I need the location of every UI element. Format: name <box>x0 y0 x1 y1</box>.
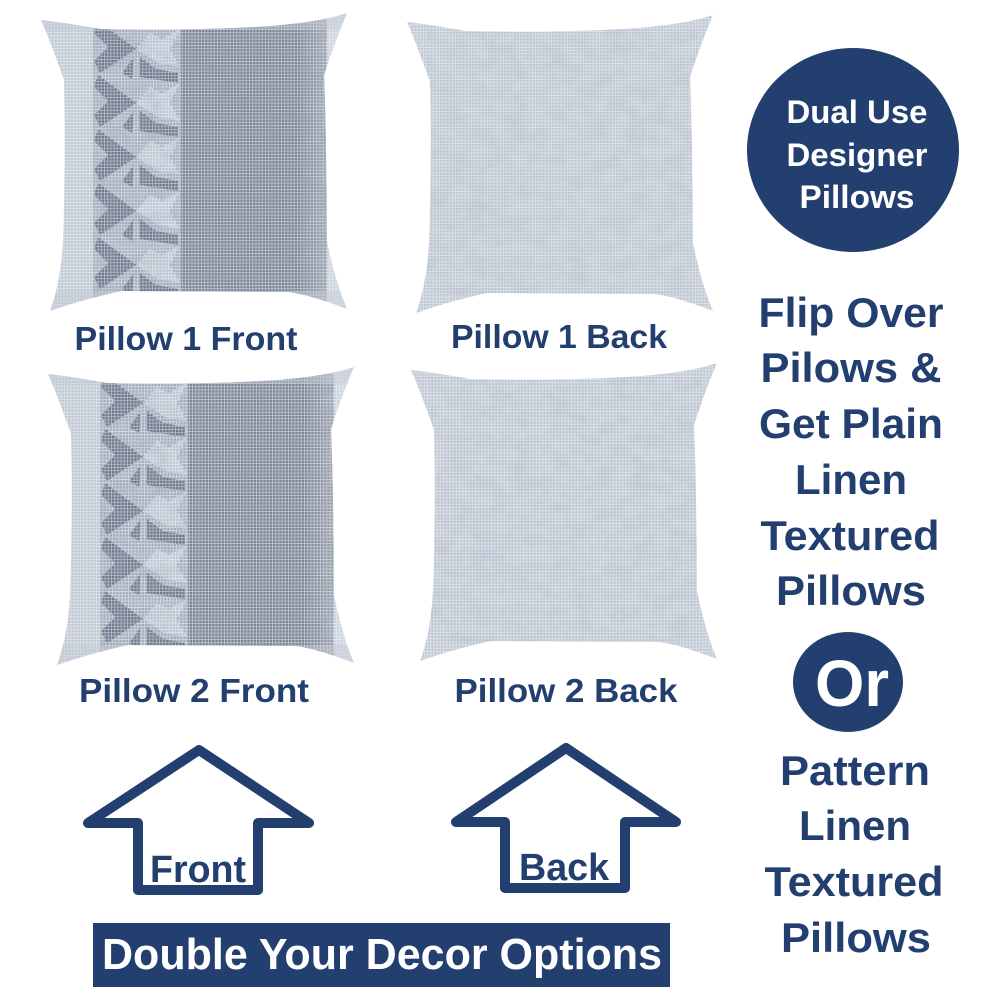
arrow: back: Back <box>519 847 610 889</box>
badge: dual use designer pillows: Dual Use <box>786 94 928 130</box>
arrow: back <box>456 748 676 889</box>
text block: flip over pillows: Textured <box>760 512 940 559</box>
text block: flip over pillows: Pillows <box>776 567 926 614</box>
text block: flip over pillows: Pilows & <box>760 344 942 391</box>
text block: flip over pillows <box>758 289 944 614</box>
arrow: front <box>88 750 309 891</box>
badge: dual use designer pillows <box>747 48 959 252</box>
arrow: front: Front <box>150 849 246 891</box>
text block: flip over pillows: Get Plain <box>759 400 943 447</box>
banner: double your decor options: Double Your Decor Options <box>102 930 662 979</box>
text block: flip over pillows: Flip Over <box>758 289 944 336</box>
text block: pattern linen <box>764 747 944 961</box>
label: pillow 2 back: Pillow 2 Back <box>454 672 678 709</box>
text block: pattern linen: Textured <box>764 858 944 905</box>
text block: pattern linen: Pillows <box>781 914 931 961</box>
badge: dual use designer pillows: Designer <box>786 137 928 173</box>
label: pillow 1 back: Pillow 1 Back <box>451 318 668 355</box>
label: pillow 2 front: Pillow 2 Front <box>79 672 309 709</box>
text block: pattern linen: Linen <box>799 802 911 849</box>
pillow 1 front <box>36 13 361 318</box>
label: pillow 1 front: Pillow 1 Front <box>74 320 298 357</box>
badge: dual use designer pillows: Pillows <box>800 179 914 215</box>
pillow 1 back <box>407 15 713 313</box>
badge: or <box>793 632 903 732</box>
pillow 2 back <box>411 363 717 661</box>
badge: or: Or <box>815 646 889 720</box>
pillow 2 front <box>43 367 368 672</box>
text block: pattern linen: Pattern <box>780 747 930 794</box>
text block: flip over pillows: Linen <box>795 456 907 503</box>
